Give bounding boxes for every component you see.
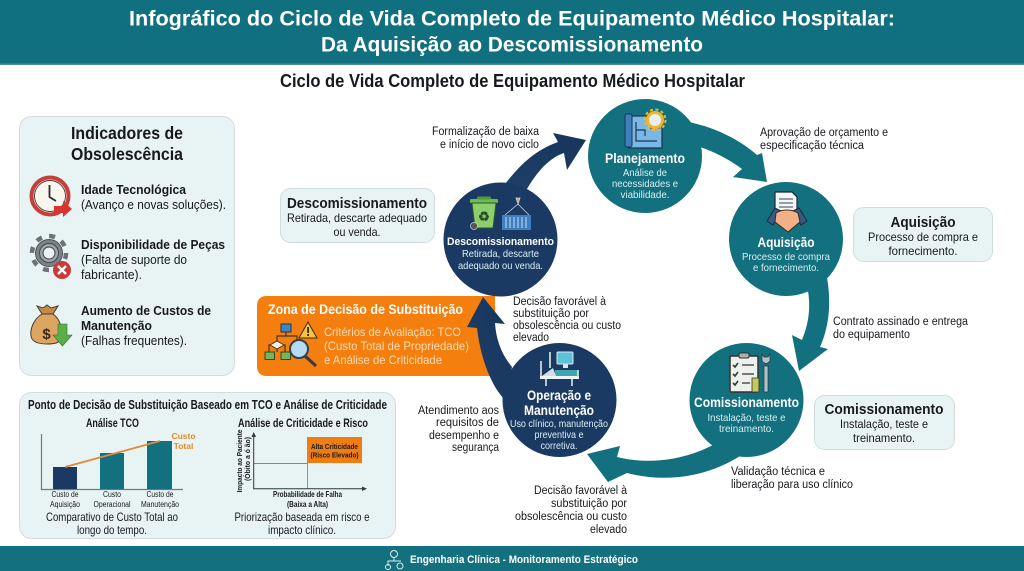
chart: análise de criticidade e risco: Priorização baseada em risco e (234, 510, 370, 524)
label: atendimento aos requisitos: Atendimento aos (418, 405, 499, 417)
indicator: aumento de custos: Manutenção (81, 319, 152, 333)
label: atendimento aos requisitos: desempenho e (429, 430, 499, 442)
label: decisão favorável (inferior): elevado (590, 524, 627, 536)
arrow: descomissionamento to planejamento (505, 133, 586, 189)
step: descomissionamento: Retirada, descarte (462, 248, 539, 260)
step: aquisição (729, 182, 843, 296)
chart: análise tco: Custo (103, 490, 121, 499)
panel: zona de decisão de substituição: (Custo Total de Propriedade) (324, 339, 469, 353)
label: decisão favorável (superior): obsolescência ou custo (513, 320, 621, 332)
chart: análise de criticidade e risco: (Óbito a ó ão) (243, 437, 252, 481)
footer bar: Engenharia Clínica - Monitoramento Estratégico (410, 554, 638, 566)
step: comissionamento: Comissionamento (694, 394, 799, 410)
panel: zona de decisão de substituição: Zona de Decisão de Substituição (268, 302, 463, 317)
label: aprovação de orçamento (760, 127, 888, 152)
chart: análise tco: Operacional (94, 500, 131, 509)
indicator: aumento de custos: (Falhas frequentes). (81, 334, 187, 348)
chart: análise tco: Aquisição (50, 500, 80, 509)
label: contrato assinado: do equipamento (833, 329, 910, 341)
step: operação e manutenção (502, 343, 616, 457)
label: aprovação de orçamento: Aprovação de orçamento e (760, 127, 888, 139)
chart: análise de criticidade e risco: Probabilidade de Falha (273, 490, 342, 499)
label: decisão favorável (superior): elevado (513, 332, 549, 344)
label: decisão favorável (superior): Decisão favorável à (513, 296, 607, 308)
icon: blueprint with gear (625, 110, 666, 148)
indicator: idade tecnológica (81, 183, 226, 212)
chart: análise de criticidade e risco: (Risco Elevado) (310, 450, 359, 460)
indicator: aumento de custos: Aumento de Custos de (81, 304, 211, 318)
step: aquisição: Aquisição (758, 235, 814, 250)
icon: contract and handshake (767, 192, 807, 232)
callout: descomissionamento: Retirada, descarte adequado (287, 211, 427, 225)
label: validação técnica: Validação técnica e (731, 466, 825, 478)
indicator: disponibilidade de peças: Disponibilidade de Peças (81, 238, 225, 252)
label: formalização de baixa: e início de novo ciclo (440, 139, 539, 151)
label: aprovação de orçamento: especificação técnica (760, 140, 865, 152)
callout: aquisição: Aquisição (890, 215, 956, 231)
step: operação e manutenção: Manutenção (524, 403, 594, 418)
callout: descomissionamento: Descomissionamento (287, 195, 427, 212)
label: atendimento aos requisitos: segurança (452, 442, 500, 454)
icon: gear with x (32, 236, 71, 279)
step: descomissionamento: Descomissionamento (447, 236, 554, 248)
step: operação e manutenção: corretiva. (540, 440, 578, 452)
step: operação e manutenção: Uso clínico, manutenção (510, 418, 608, 430)
chart: análise de criticidade e risco (234, 416, 370, 537)
callout: aquisição: Processo de compra e (868, 230, 978, 244)
step: planejamento: Análise de (623, 167, 667, 179)
indicator: disponibilidade de peças: fabricante). (81, 268, 142, 282)
icon: checklist and wrench (730, 353, 770, 392)
icon: money bag with down arrow: $ (42, 326, 51, 343)
callout: comissionamento (814, 396, 954, 450)
step: descomissionamento: adequado ou venda. (458, 260, 543, 272)
chart: análise tco: Comparativo de Custo Total ao (46, 510, 178, 524)
panel: zona de decisão de substituição: Critérios de Avaliação: TCO (324, 325, 461, 339)
panel heading: Ponto de Decisão de Substituição Baseado em TCO e Análise de Criticidade (28, 398, 387, 412)
indicator: aumento de custos (81, 304, 211, 348)
panel heading: Indicadores de (71, 123, 183, 143)
chart: análise tco: Total (174, 441, 193, 451)
panel heading (71, 123, 183, 164)
label: atendimento aos requisitos (418, 405, 500, 454)
step: operação e manutenção: Operação e (527, 388, 591, 403)
step: planejamento (588, 99, 702, 213)
panel: zona de decisão de substituição (257, 296, 495, 376)
header banner (0, 0, 1024, 65)
panel heading: Obsolescência (71, 144, 183, 164)
chart: análise tco: Análise TCO (86, 416, 139, 430)
arrow: comissionamento to operação (587, 445, 740, 482)
label: decisão favorável (inferior): Decisão favorável à (534, 485, 628, 497)
icon: hospital bed and monitor (540, 352, 579, 386)
label: atendimento aos requisitos: requisitos de (436, 417, 499, 429)
section heading: Ciclo de Vida Completo de Equipamento Médico Hospitalar (280, 71, 745, 91)
callout: comissionamento: Instalação, teste e (840, 417, 928, 431)
callout: aquisição: fornecimento. (888, 244, 958, 258)
chart: análise de criticidade e risco: Alta Criticidade (311, 442, 358, 451)
chart: análise tco (42, 416, 196, 537)
panel: ponto de decisão de substituição (20, 392, 396, 538)
chart: análise tco: longo do tempo. (77, 523, 147, 537)
chart: análise de criticidade e risco: (Baixa a Alta) (287, 500, 328, 509)
icon: flowchart with magnifier and warning (265, 322, 317, 366)
label: formalização de baixa (432, 126, 540, 151)
icon: clock (32, 178, 72, 217)
indicator: disponibilidade de peças: (Falta de suporte do (81, 253, 187, 267)
label: contrato assinado: Contrato assinado e entrega (833, 316, 969, 328)
label: decisão favorável (inferior) (515, 485, 628, 536)
icon: money bag with down arrow (31, 305, 72, 346)
step: comissionamento: treinamento. (719, 423, 774, 435)
chart: análise tco: Manutenção (141, 500, 179, 509)
chart: análise de criticidade e risco: impacto clínico. (268, 523, 336, 537)
callout: comissionamento: treinamento. (853, 431, 915, 445)
label: validação técnica (731, 466, 853, 491)
label: decisão favorável (superior): substituição por (513, 308, 589, 320)
label: decisão favorável (inferior): obsolescência ou custo (515, 511, 627, 523)
step: planejamento: viabilidade. (620, 189, 670, 201)
step: aquisição: Processo de compra (742, 251, 830, 263)
step: planejamento: necessidades e (612, 178, 678, 190)
arrow: planejamento to aquisição (688, 122, 767, 182)
step: comissionamento: Instalação, teste e (708, 412, 786, 424)
step: comissionamento (690, 343, 804, 457)
callout: descomissionamento: ou venda. (334, 225, 380, 239)
panel: zona de decisão de substituição: e Análise de Criticidade (324, 353, 442, 367)
chart: análise de criticidade e risco: Impacto ao Paciente (237, 429, 244, 492)
chart: análise tco: Custo de (52, 490, 79, 499)
icon: clinical engineer (386, 550, 403, 570)
chart: análise tco: Custo (171, 431, 196, 441)
callout: aquisição (854, 208, 992, 262)
panel: indicadores de obsolescência (20, 116, 234, 376)
step: descomissionamento (444, 182, 558, 296)
callout: comissionamento: Comissionamento (824, 402, 944, 418)
callout: descomissionamento (280, 188, 434, 242)
footer bar (0, 546, 1024, 571)
step: planejamento: Planejamento (605, 151, 685, 166)
indicator: disponibilidade de peças (81, 238, 225, 282)
header banner: Infográfico do Ciclo de Vida Completo de Equipamento Médico Hospitalar: (129, 8, 895, 30)
icon: recycling bin and container: ♻ (478, 209, 490, 224)
header banner: Da Aquisição ao Descomissionamento (321, 34, 703, 56)
arrow: aquisição to comissionamento (792, 278, 829, 371)
step: aquisição: e fornecimento. (753, 262, 819, 274)
label: decisão favorável (inferior): substituição por (551, 498, 627, 510)
indicator: idade tecnológica: Idade Tecnológica (81, 183, 187, 197)
chart: análise de criticidade e risco: Análise de Criticidade e Risco (238, 416, 368, 430)
label: formalização de baixa: Formalização de baixa (432, 126, 540, 138)
label: validação técnica: liberação para uso clínico (731, 479, 853, 491)
indicator: idade tecnológica: (Avanço e novas soluções). (81, 198, 226, 212)
arrow: operação to descomissionamento (467, 297, 512, 400)
chart: análise tco: Custo de (146, 490, 174, 499)
label: contrato assinado (833, 316, 969, 341)
step: operação e manutenção: preventiva e (534, 429, 584, 441)
label: decisão favorável (superior) (513, 296, 621, 344)
